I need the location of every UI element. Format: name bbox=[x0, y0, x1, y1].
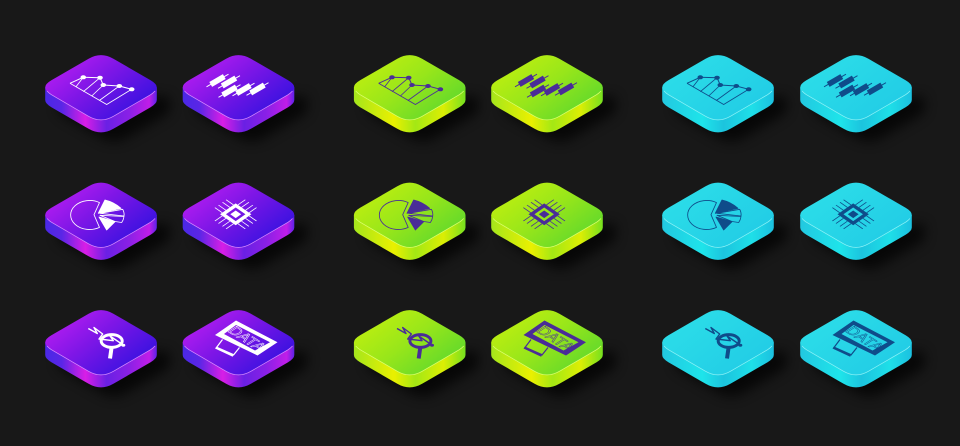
tile base bbox=[800, 55, 925, 141]
icon: line chart bbox=[379, 75, 443, 104]
icon: pie chart bbox=[688, 200, 741, 230]
tile: line chart, purple bbox=[45, 55, 170, 141]
icon: processor bbox=[205, 193, 266, 236]
tile: candlesticks, green bbox=[491, 55, 616, 141]
icon: candlesticks bbox=[515, 74, 577, 97]
tile base bbox=[354, 55, 478, 141]
tile: pie chart, cyan bbox=[662, 183, 787, 269]
icon: monitor with DATA: DATA bbox=[224, 324, 270, 354]
icon: processor bbox=[823, 193, 884, 236]
tile base bbox=[491, 55, 616, 141]
tile base bbox=[354, 310, 478, 396]
tile base bbox=[183, 183, 307, 269]
tile base bbox=[662, 310, 787, 396]
icon: magnifier with pulse line bbox=[397, 328, 434, 358]
tile: magnifier, cyan bbox=[662, 310, 787, 396]
tile: pie chart, green bbox=[354, 183, 478, 269]
tile: monitor, cyan bbox=[800, 310, 925, 396]
tile base bbox=[800, 310, 925, 396]
tile: monitor, green bbox=[491, 310, 616, 396]
tile: monitor, purple bbox=[183, 310, 307, 396]
tile base bbox=[491, 183, 616, 269]
icon: candlesticks bbox=[206, 74, 268, 97]
icon: candlesticks bbox=[824, 74, 886, 97]
icon: line chart bbox=[70, 75, 134, 104]
icon: processor bbox=[514, 193, 575, 236]
tile base bbox=[491, 310, 616, 396]
tile: processor, purple bbox=[183, 183, 307, 269]
tile base bbox=[183, 55, 307, 141]
icon: pie chart bbox=[71, 200, 124, 230]
icon: line chart bbox=[687, 75, 752, 104]
icon: pie chart bbox=[379, 200, 433, 230]
tile base bbox=[662, 183, 787, 269]
tile base bbox=[45, 183, 170, 269]
tile: line chart, cyan bbox=[662, 55, 787, 141]
tile: processor, green bbox=[491, 183, 616, 269]
tile: magnifier, purple bbox=[45, 310, 170, 396]
tile: candlesticks, cyan bbox=[800, 55, 925, 141]
tile base bbox=[183, 310, 307, 396]
panel: green set bbox=[354, 55, 616, 396]
tile: magnifier, green bbox=[354, 310, 478, 396]
tile: line chart, green bbox=[354, 55, 478, 141]
icon: monitor with DATA: DATA bbox=[532, 324, 578, 354]
tile base bbox=[45, 310, 170, 396]
tile: candlesticks, purple bbox=[183, 55, 307, 141]
panel: purple set bbox=[45, 55, 307, 396]
tile base bbox=[800, 183, 925, 269]
tile base bbox=[662, 55, 787, 141]
tile: processor, cyan bbox=[800, 183, 925, 269]
tile base bbox=[45, 55, 170, 141]
icon: magnifier with pulse line bbox=[705, 328, 742, 358]
tile: pie chart, purple bbox=[45, 183, 170, 269]
tile base bbox=[354, 183, 478, 269]
icon: magnifier with pulse line bbox=[88, 328, 125, 358]
icon: monitor with DATA: DATA bbox=[841, 324, 887, 354]
panel: cyan set bbox=[662, 55, 925, 396]
